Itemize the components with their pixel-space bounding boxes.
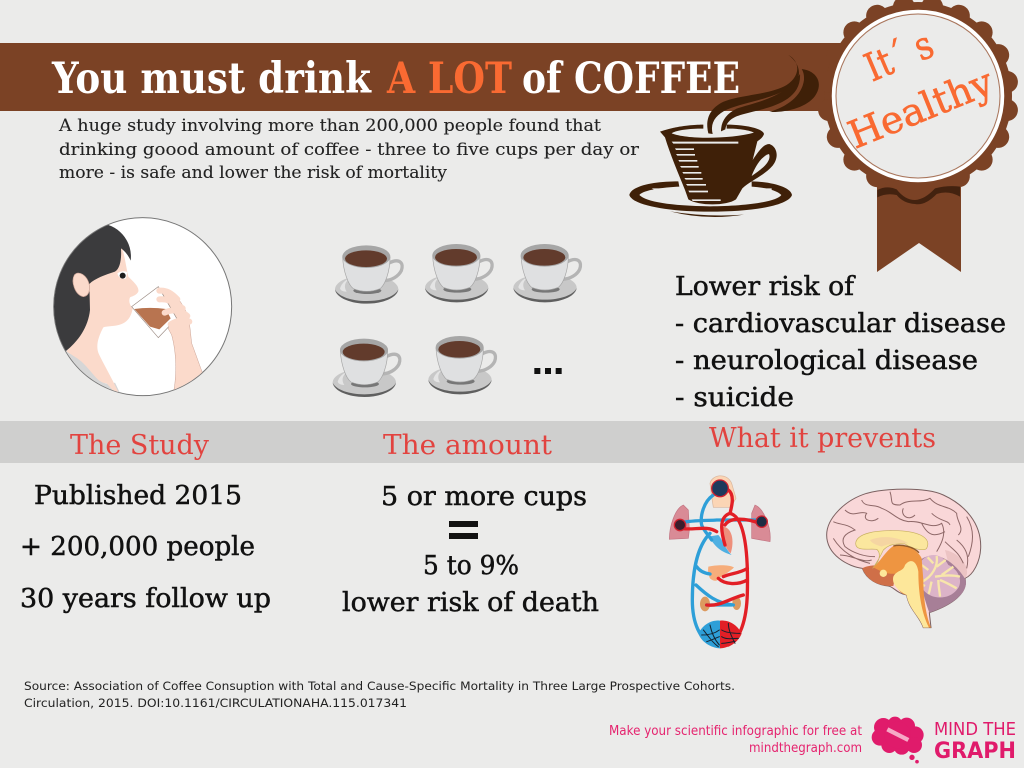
lower risk list: Lower risk of (675, 271, 856, 302)
mind the graph promo text: mindthegraph.com (749, 741, 862, 756)
lower risk list: - suicide (675, 382, 794, 413)
section band (0, 421, 1024, 463)
glass (132, 287, 177, 338)
study facts: + 200,000 people (20, 531, 255, 562)
intro paragraph: more - is safe and lower the risk of mortality (59, 163, 448, 182)
ribbon tail (877, 170, 961, 272)
coffee cups row (333, 244, 580, 397)
ear (73, 273, 89, 297)
study facts (20, 480, 271, 614)
source citation (24, 679, 735, 710)
cup 4 (333, 339, 400, 397)
title banner (0, 43, 850, 111)
fingers (159, 291, 189, 324)
ribbon dark wave (877, 186, 960, 204)
heading: The Study: The Study (70, 430, 210, 461)
title: You must drink (51, 54, 372, 104)
lower risk list: - neurological disease (675, 345, 978, 376)
heading: What it prevents: What it prevents (709, 423, 936, 454)
title (51, 54, 740, 104)
amount facts (342, 481, 599, 618)
title: A LOT (386, 54, 512, 104)
heading: The amount: The amount (383, 430, 552, 461)
shirt (65, 350, 120, 392)
skin (67, 247, 138, 400)
coffee in glass (134, 308, 171, 329)
arm (163, 294, 202, 390)
seal text: Healthy: Healthy (842, 59, 1000, 157)
cup 5 (428, 336, 495, 394)
lower risk list: - cardiovascular disease (675, 308, 1006, 339)
ellipsis dots (534, 368, 562, 374)
title: of COFFEE (522, 54, 740, 104)
mind the graph promo text (609, 724, 862, 756)
icon: brain (827, 489, 981, 628)
intro paragraph (58, 116, 639, 182)
amount facts: 5 to 9% (423, 550, 519, 581)
intro paragraph: drinking goood amount of coffee - three to five cups per day or (59, 140, 639, 159)
logo wordmark (934, 719, 1016, 764)
mind the graph logo (872, 717, 924, 763)
illustration: woman drinking (40, 218, 232, 400)
source citation: Source: Association of Coffee Consuption with Total and Cause-Specific Mortality in Three Large Prospective Cohorts. (24, 679, 735, 693)
cup 3 (513, 244, 580, 302)
amount facts: lower risk of death (342, 587, 599, 618)
study facts: Published 2015 (34, 480, 242, 511)
icon: circulatory system (669, 476, 770, 648)
cup 2 (425, 244, 492, 302)
logo wordmark: MIND THE (934, 719, 1016, 740)
intro paragraph: A huge study involving more than 200,000 people found that (58, 116, 601, 135)
eye (117, 271, 127, 279)
mind the graph promo text: Make your scientific infographic for free at (609, 724, 862, 739)
hair (54, 225, 131, 351)
study facts: 30 years follow up (20, 583, 271, 614)
lower risk list (675, 271, 1006, 413)
coffee cup icon with steam (629, 55, 819, 217)
cup 1 (335, 245, 402, 304)
amount facts: 5 or more cups (381, 481, 587, 512)
seal text: It's: It´ s (858, 22, 940, 91)
source citation: Circulation, 2015. DOI:10.1161/CIRCULATIONAHA.115.017341 (24, 696, 407, 710)
seal badge (817, 0, 1019, 197)
logo wordmark: GRAPH (934, 739, 1016, 764)
